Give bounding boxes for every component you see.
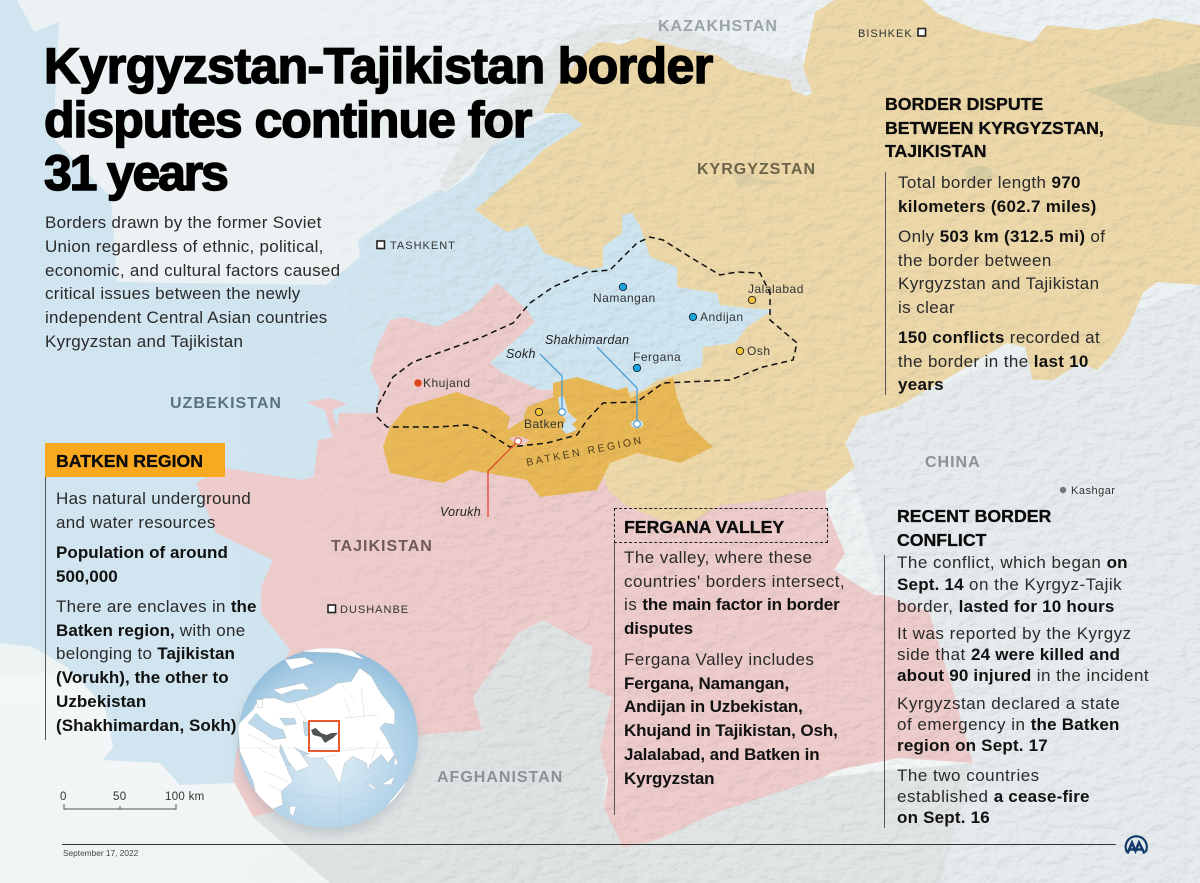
globe seas (248, 713, 286, 740)
fact: casualties: It was reported by the Kyrgyz (897, 624, 1132, 643)
heading box (614, 508, 828, 543)
heading box (45, 443, 225, 477)
intro text: economic, and cultural factors caused (45, 261, 340, 280)
heading box: FERGANA VALLEY (624, 517, 784, 537)
fact: enclaves: belonging to Tajikistan (56, 644, 235, 663)
heading (885, 94, 1104, 161)
scale bar: 0 (60, 791, 67, 803)
Song-Kul lake (965, 166, 993, 182)
panel: Fergana valley (614, 508, 845, 815)
heading: BORDER DISPUTE (885, 94, 1043, 114)
fact: population: 500,000 (56, 567, 118, 586)
fact: enclaves: There are enclaves in the (56, 597, 256, 616)
Tajikistan territory (196, 283, 973, 848)
intro text: critical issues between the newly (45, 284, 301, 303)
fact: emergency: Kyrgyzstan declared a state (897, 694, 1120, 713)
fact: casualties: about 90 injured in the incident (897, 666, 1149, 685)
fact: clear portion: Kyrgyzstan and Tajikistan (898, 274, 1100, 293)
intro text (45, 213, 340, 351)
fact: conflicts: the border in the last 10 (898, 352, 1089, 371)
fact: casualties: side that 24 were killed and (897, 645, 1120, 664)
fact: length: kilometers (602.7 miles) (898, 197, 1097, 216)
heading: RECENT BORDER (897, 506, 1051, 526)
fact: clear portion: is clear (898, 298, 955, 317)
fact: enclaves: Uzbekistan (56, 692, 146, 711)
country label: Afghanistan: AFGHANISTAN (437, 769, 563, 786)
city: Batken (524, 408, 564, 431)
scale bar (60, 791, 205, 809)
Batken region (383, 377, 713, 497)
enclave label: Shakhimardan: Shakhimardan (545, 333, 629, 347)
terrain relief (334, 0, 1200, 883)
capital: Dushanbe: DUSHANBE (340, 604, 409, 616)
fact: main factor: The valley, where these (624, 548, 812, 567)
fact: conflicts: years (898, 375, 944, 394)
fact: emergency (897, 694, 1120, 755)
fact: resources (56, 489, 251, 532)
leader: Vorukh (488, 438, 521, 517)
fact: cease-fire: on Sept. 16 (897, 808, 990, 827)
title: Kyrgyzstan-Tajikistan border (44, 38, 713, 94)
fact: population (56, 543, 228, 586)
reservoir arm (306, 398, 347, 440)
heading box: BATKEN REGION (56, 451, 203, 471)
fact: clear portion: the border between (898, 251, 1052, 270)
Vorukh enclave (509, 436, 530, 447)
fact: main factor: disputes (624, 619, 693, 638)
fact: enclaves: (Shakhimardan, Sokh) (56, 716, 236, 735)
fact: conflicts (898, 328, 1100, 394)
fact: includes: Fergana, Namangan, (624, 674, 789, 693)
city: Namangan (593, 283, 656, 305)
globe highlight (309, 721, 339, 751)
fact: main factor (624, 548, 845, 638)
panel: Batken region (45, 443, 256, 740)
country label: Kazakhstan: KAZAKHSTAN (658, 18, 778, 35)
globe dark shape (311, 728, 338, 743)
fact: start: border, lasted for 10 hours (897, 597, 1115, 616)
city: Batken: Batken (524, 417, 564, 431)
fact: includes (624, 650, 838, 788)
city: Jalalabad (748, 282, 804, 304)
Uzbekistan territory (0, 0, 640, 785)
fact: casualties (897, 624, 1149, 685)
fact: start: The conflict, which began on (897, 553, 1128, 572)
fact: cease-fire: The two countries (897, 766, 1040, 785)
panel: border dispute (885, 94, 1105, 395)
Issyk-Kul lake (1083, 62, 1200, 127)
fact: includes: Jalalabad, and Batken in (624, 745, 820, 764)
scale bar: 100 km (165, 791, 205, 803)
enclave label: Sokh: Sokh (506, 347, 536, 361)
logo: Anadolu Agency (1126, 836, 1147, 854)
title: disputes continue for (44, 92, 531, 148)
Sokh enclave (558, 397, 577, 434)
Afghanistan terrain (253, 620, 660, 883)
heading: BETWEEN KYRGYZSTAN, (885, 118, 1104, 138)
fact: emergency: of emergency in the Batken (897, 715, 1120, 734)
heading (897, 506, 1052, 550)
panel: recent border conflict (884, 506, 1149, 828)
rule (45, 477, 46, 740)
heading: CONFLICT (897, 530, 986, 550)
fact: includes: Khujand in Tajikistan, Osh, (624, 721, 838, 740)
date: September 17, 2022 (63, 848, 139, 858)
city: Jalalabad: Jalalabad (748, 282, 804, 296)
dashed outline of Fergana valley (377, 237, 797, 447)
fact: length (898, 173, 1097, 216)
fact: clear portion: Only 503 km (312.5 mi) of (898, 227, 1105, 246)
rule (884, 555, 885, 828)
city: Fergana (633, 350, 681, 372)
fact: includes: Fergana Valley includes (624, 650, 814, 669)
heading: TAJIKISTAN (885, 141, 987, 161)
fact: resources: Has natural underground (56, 489, 251, 508)
southern terrain (623, 763, 973, 883)
city: Osh: Osh (747, 344, 771, 358)
fact: resources: and water resources (56, 513, 216, 532)
country label: Kyrgyzstan: KYRGYZSTAN (697, 161, 816, 178)
fact: emergency: region on Sept. 17 (897, 736, 1048, 755)
intro text: Borders drawn by the former Soviet (45, 213, 322, 232)
scale bar: 50 (113, 791, 126, 803)
fact: includes: Andijan in Uzbekistan, (624, 697, 803, 716)
Shakhimardan enclave (631, 420, 643, 428)
leader: Shakhimardan (597, 347, 640, 427)
city: Andijan: Andijan (700, 310, 744, 324)
fact: population: Population of around (56, 543, 228, 562)
fact: main factor: is the main factor in border (624, 595, 840, 614)
Kyrgyzstan territory (475, 0, 1200, 523)
country label: China: CHINA (925, 454, 981, 471)
fact: conflicts: 150 conflicts recorded at (898, 328, 1100, 347)
capital: Tashkent: TASHKENT (390, 240, 456, 252)
fact: start: Sept. 14 on the Kyrgyz-Tajik (897, 575, 1122, 594)
enclave label: Vorukh: Vorukh (440, 505, 481, 519)
rule (885, 172, 886, 395)
fact: length: Total border length 970 (898, 173, 1081, 192)
fact: start (897, 553, 1128, 616)
city: Fergana: Fergana (633, 350, 681, 364)
fact: cease-fire (897, 766, 1090, 827)
intro text: independent Central Asian countries (45, 308, 328, 327)
footer line (62, 844, 1116, 846)
fact: clear portion (898, 227, 1105, 317)
city: Osh (736, 344, 771, 358)
intro text: Kyrgyzstan and Tajikistan (45, 332, 243, 351)
fact: enclaves: Batken region, with one (56, 621, 246, 640)
city: Namangan: Namangan (593, 291, 656, 305)
Fergana valley Uzbekistan (490, 213, 773, 393)
country label: Uzbekistan: UZBEKISTAN (170, 395, 282, 412)
title: 31 years (44, 145, 227, 201)
China terrain (845, 285, 1200, 883)
intro text: Union regardless of ethnic, political, (45, 237, 324, 256)
capital: Bishkek: BISHKEK (858, 28, 913, 40)
fact: enclaves: (Vorukh), the other to (56, 668, 229, 687)
fact: enclaves (56, 597, 256, 735)
region label: Batken Region: BATKEN REGION (525, 434, 645, 469)
leader: Sokh (540, 354, 565, 415)
northern terrain Kazakhstan (440, 22, 812, 192)
fact: includes: Kyrgyzstan (624, 769, 714, 788)
locator globe (238, 648, 418, 834)
city: Kashgar: Kashgar (1071, 485, 1115, 497)
rule (614, 543, 615, 815)
country label: Tajikistan: TAJIKISTAN (331, 538, 433, 555)
Toktogul lake (733, 172, 787, 187)
fact: cease-fire: established a cease-fire (897, 787, 1090, 806)
city: Khujand: Khujand (423, 376, 471, 390)
fact: main factor: countries' borders intersect, (624, 572, 845, 591)
title (44, 38, 714, 202)
